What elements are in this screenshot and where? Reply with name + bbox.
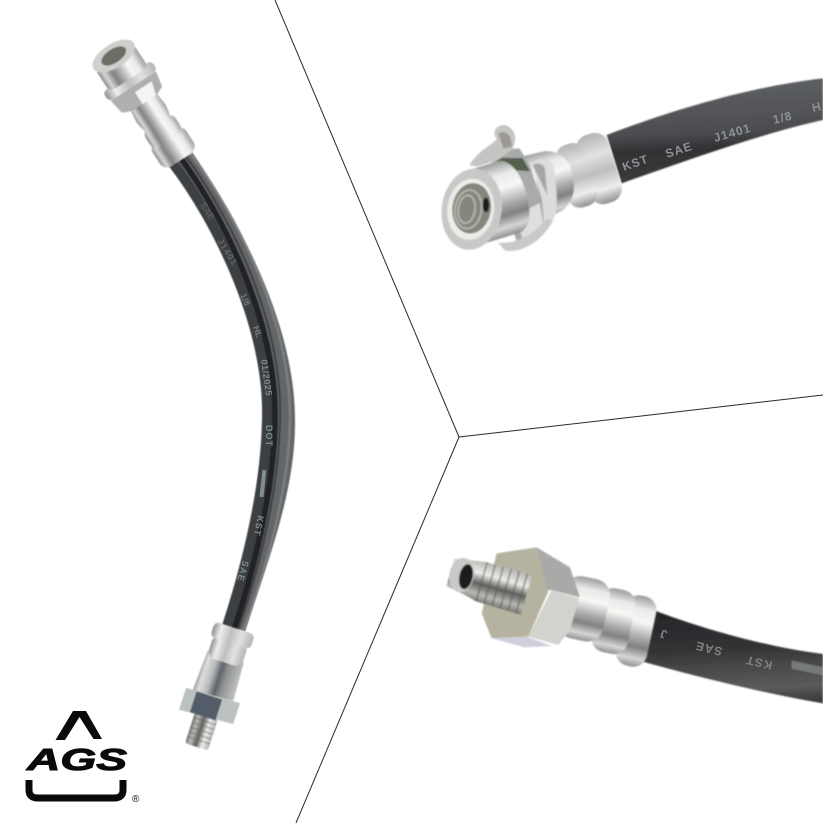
close-up hose printing: J1401 bbox=[712, 121, 753, 145]
close-up fitting bbox=[436, 117, 629, 254]
logo top chevron bbox=[56, 711, 102, 740]
divider lines bbox=[275, 0, 823, 823]
close-up hose printing bbox=[658, 626, 774, 673]
hose printing: HL bbox=[251, 325, 264, 340]
hose printing: SAE bbox=[235, 559, 251, 583]
logo: AGS bbox=[26, 711, 140, 805]
hose printing: KST bbox=[252, 515, 266, 537]
close-up hose printing: SAE bbox=[693, 638, 724, 659]
hose printing: 1/8 bbox=[238, 292, 252, 307]
logo bottom bracket bbox=[29, 780, 123, 798]
hose printing: 01/2025 bbox=[259, 359, 274, 397]
close-up hose bbox=[637, 610, 823, 703]
hose printing: J1401 bbox=[215, 237, 240, 268]
panel: full brake hose bbox=[83, 30, 295, 756]
close-up hose printing: H bbox=[811, 99, 823, 115]
close-up threaded fitting bbox=[444, 547, 660, 669]
bottom fitting bbox=[170, 619, 262, 756]
close-up hose printing: SAE bbox=[664, 139, 694, 161]
top fitting bbox=[83, 30, 206, 176]
hose printing bbox=[198, 201, 274, 583]
hose printing: DOT bbox=[264, 425, 274, 447]
close-up hose bbox=[607, 78, 823, 183]
logo wordmark: AGS bbox=[26, 742, 127, 777]
close-up hose printing: KST bbox=[620, 152, 651, 174]
close-up hose printing bbox=[620, 99, 823, 174]
close-up hose printing: 1/8 bbox=[771, 109, 794, 127]
close-up hose printing: KST bbox=[744, 653, 774, 673]
registered mark: ® bbox=[132, 794, 140, 805]
panel: top-right close-up of banjo fitting bbox=[436, 78, 823, 254]
close-up hose printing: J bbox=[658, 626, 669, 642]
panel: bottom-right close-up of threaded fitting bbox=[444, 547, 823, 703]
hose body bbox=[168, 152, 295, 632]
hose printing: SAE bbox=[198, 201, 217, 222]
